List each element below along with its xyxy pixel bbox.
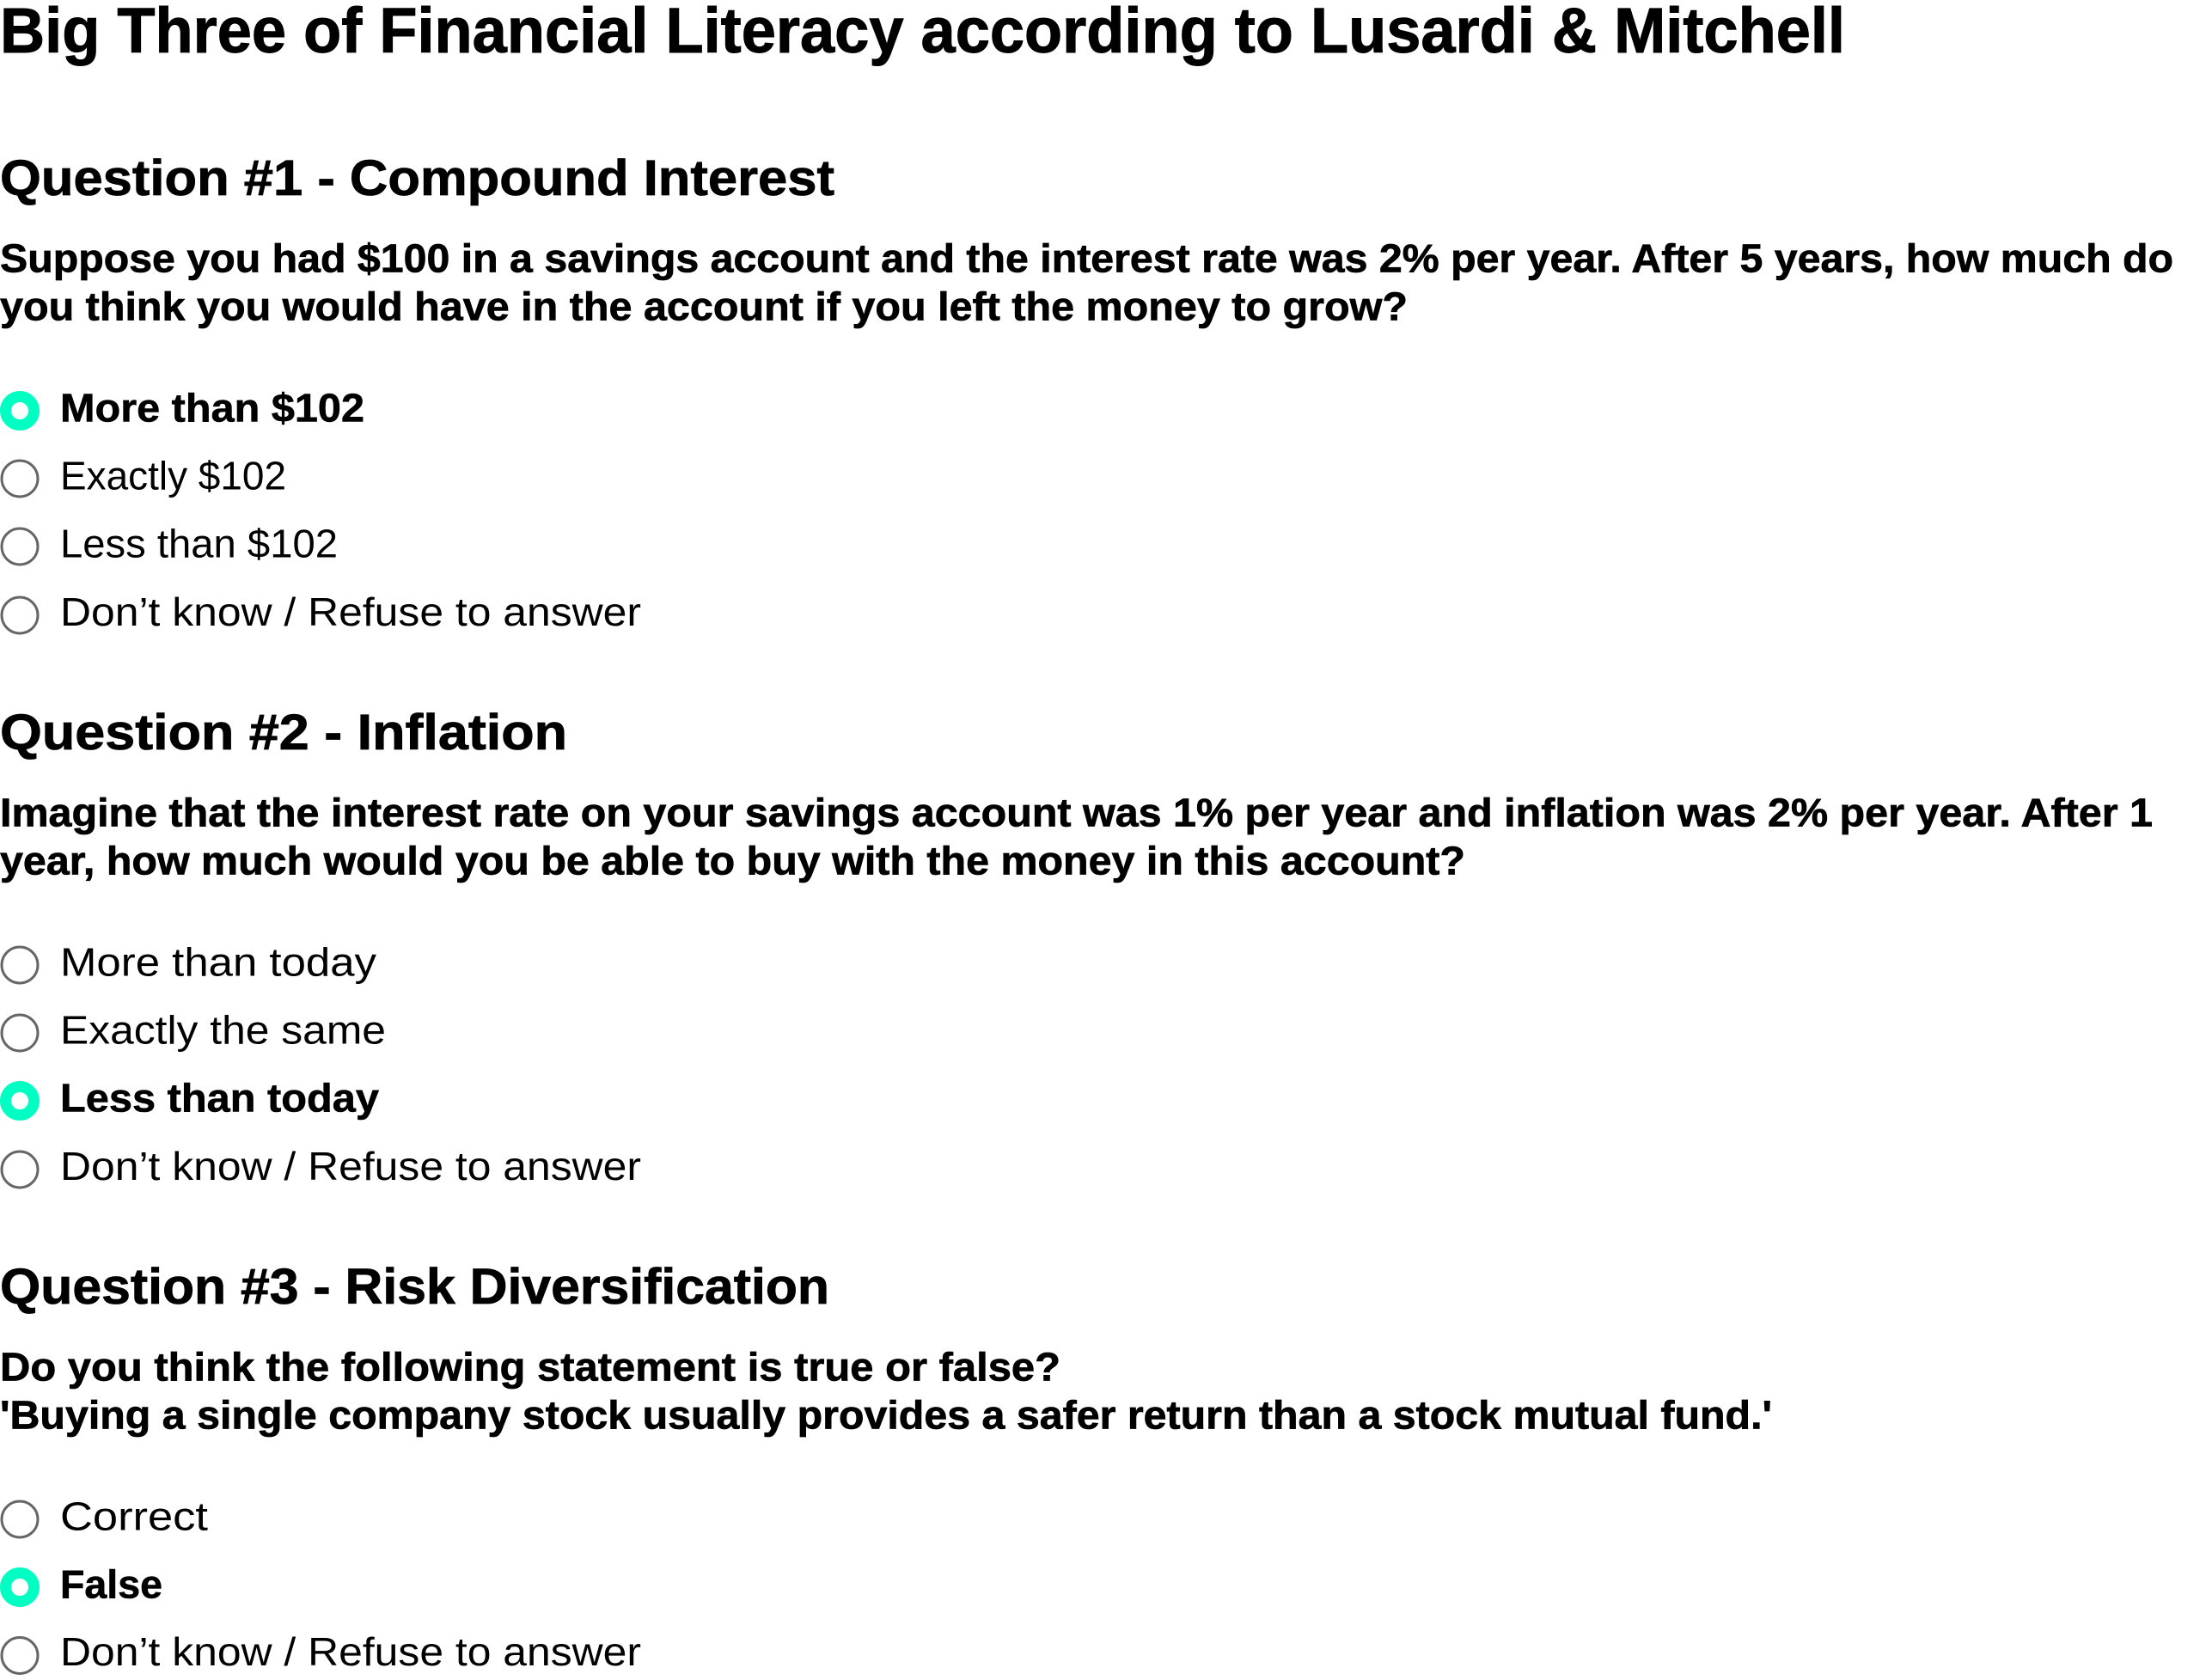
heading: question 1: Question #1 - Compound Interest xyxy=(0,150,834,206)
option: Don't know: Don’t know / Refuse to answer xyxy=(60,590,641,634)
option: Correct xyxy=(2,1494,208,1538)
option: Less than today (selected): Less than today xyxy=(60,1076,379,1121)
option: Don't know: Don’t know / Refuse to answer xyxy=(60,1629,641,1674)
question 3 text: 'Buying a single company stock usually provides a safer return than a stock mutual fund.' xyxy=(0,1392,1772,1437)
panel: question 2 xyxy=(0,705,2153,1188)
heading: question 3: Question #3 - Risk Diversification xyxy=(0,1259,829,1315)
question 2 text: year, how much would you be able to buy with the money in this account? xyxy=(0,839,1465,883)
question 1 text: Suppose you had $100 in a savings account and the interest rate was 2% per year. After 5 years, how much do xyxy=(0,235,2173,280)
option: Less than $102: Less than $102 xyxy=(60,521,338,565)
option: More than $102 (selected): More than $102 xyxy=(60,385,364,430)
option: False (selected): False xyxy=(60,1562,162,1607)
question 3 text xyxy=(0,1344,1772,1437)
question 1 text: you think you would have in the account if you left the money to grow? xyxy=(0,284,1408,328)
option: More than today: More than today xyxy=(60,940,376,985)
option: Exactly $102: Exactly $102 xyxy=(60,454,286,498)
option: False (selected) xyxy=(5,1562,162,1607)
option: Don't know: Don’t know / Refuse to answer xyxy=(60,1144,641,1188)
option: Correct: Correct xyxy=(60,1494,208,1538)
panel: question 1 xyxy=(0,150,2173,634)
heading: question 2: Question #2 - Inflation xyxy=(0,705,567,761)
panel: question 3 xyxy=(0,1259,1772,1674)
question 2 text xyxy=(0,791,2153,883)
option: Exactly the same: Exactly the same xyxy=(60,1007,386,1052)
question 1 text xyxy=(0,235,2173,328)
question 3 text: Do you think the following statement is true or false? xyxy=(0,1344,1060,1389)
question 2 text: Imagine that the interest rate on your savings account was 1% per year and inflation was 2% per year. After 1 xyxy=(0,791,2153,835)
